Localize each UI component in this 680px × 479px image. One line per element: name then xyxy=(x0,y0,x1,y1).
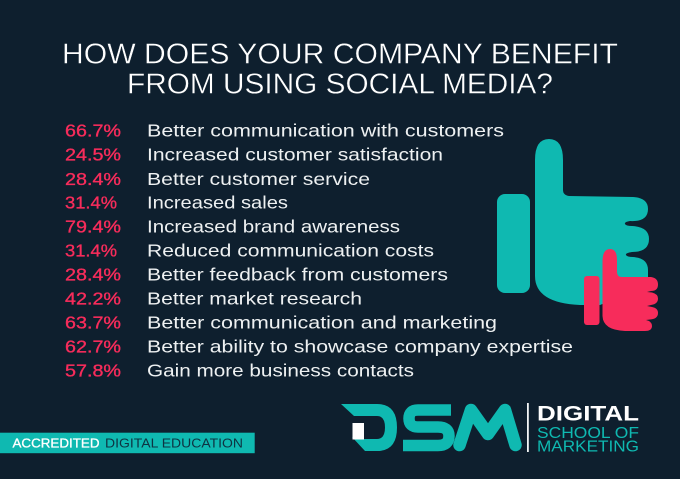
banner: accredited digital education xyxy=(0,433,255,453)
row: increased customer satisfaction xyxy=(65,145,443,165)
row: better market research xyxy=(65,288,362,308)
row: increased customer satisfaction: Increased customer satisfaction xyxy=(147,145,443,165)
row: better ability to showcase company expertise xyxy=(65,336,573,356)
row: better customer service xyxy=(65,169,370,189)
logo divider xyxy=(527,403,529,452)
row: better feedback from customers: Better feedback from customers xyxy=(147,265,448,285)
banner: accredited digital education: ACCREDITED xyxy=(12,436,100,450)
row: better communication with customers: 66.7% xyxy=(65,121,121,141)
row: increased brand awareness xyxy=(65,217,400,237)
logo letter S xyxy=(403,410,451,446)
row: better feedback from customers xyxy=(65,265,448,285)
row: better communication with customers: Better communication with customers xyxy=(147,121,504,141)
title: HOW DOES YOUR COMPANY BENEFIT xyxy=(62,38,618,70)
logo wordmark: MARKETING xyxy=(537,439,639,456)
row: increased brand awareness: Increased brand awareness xyxy=(147,217,400,237)
row: increased sales: 31.4% xyxy=(65,192,117,212)
icon: large teal thumbs up xyxy=(497,139,649,305)
row: better feedback from customers: 28.4% xyxy=(65,265,121,285)
logo wordmark: SCHOOL OF xyxy=(537,425,639,442)
row: increased brand awareness: 79.4% xyxy=(65,217,121,237)
row: gain more business contacts: 57.8% xyxy=(65,361,121,381)
row: better ability to showcase company expertise: 62.7% xyxy=(65,336,121,356)
icon: small pink thumbs up xyxy=(584,249,658,331)
row: reduced communication costs: 31.4% xyxy=(65,241,117,261)
row: better communication and marketing: 63.7% xyxy=(65,313,121,333)
row: reduced communication costs xyxy=(65,241,434,261)
title: FROM USING SOCIAL MEDIA? xyxy=(127,68,553,100)
logo white square xyxy=(352,423,364,440)
list of benefits xyxy=(65,121,573,381)
banner: accredited digital education: DIGITAL EDUCATION xyxy=(105,436,243,450)
row: increased customer satisfaction: 24.5% xyxy=(65,145,121,165)
logo letter M xyxy=(460,410,516,445)
row: better communication with customers xyxy=(65,121,504,141)
row: better communication and marketing xyxy=(65,313,497,333)
row: better customer service: Better customer service xyxy=(147,169,370,189)
row: increased sales: Increased sales xyxy=(147,192,288,212)
row: better ability to showcase company expertise: Better ability to showcase company expertise xyxy=(147,336,573,356)
row: reduced communication costs: Reduced communication costs xyxy=(147,241,434,261)
logo wordmark: DIGITAL xyxy=(537,403,639,426)
row: better market research: 42.2% xyxy=(65,288,121,308)
logo: DSM xyxy=(341,403,639,456)
row: gain more business contacts: Gain more business contacts xyxy=(147,361,414,381)
row: better market research: Better market research xyxy=(147,288,362,308)
row: better customer service: 28.4% xyxy=(65,169,121,189)
title xyxy=(62,38,618,100)
row: increased sales xyxy=(65,192,288,212)
row: better communication and marketing: Better communication and marketing xyxy=(147,313,497,333)
row: gain more business contacts xyxy=(65,361,414,381)
logo wordmark xyxy=(537,403,639,456)
logo letter D xyxy=(341,404,397,451)
